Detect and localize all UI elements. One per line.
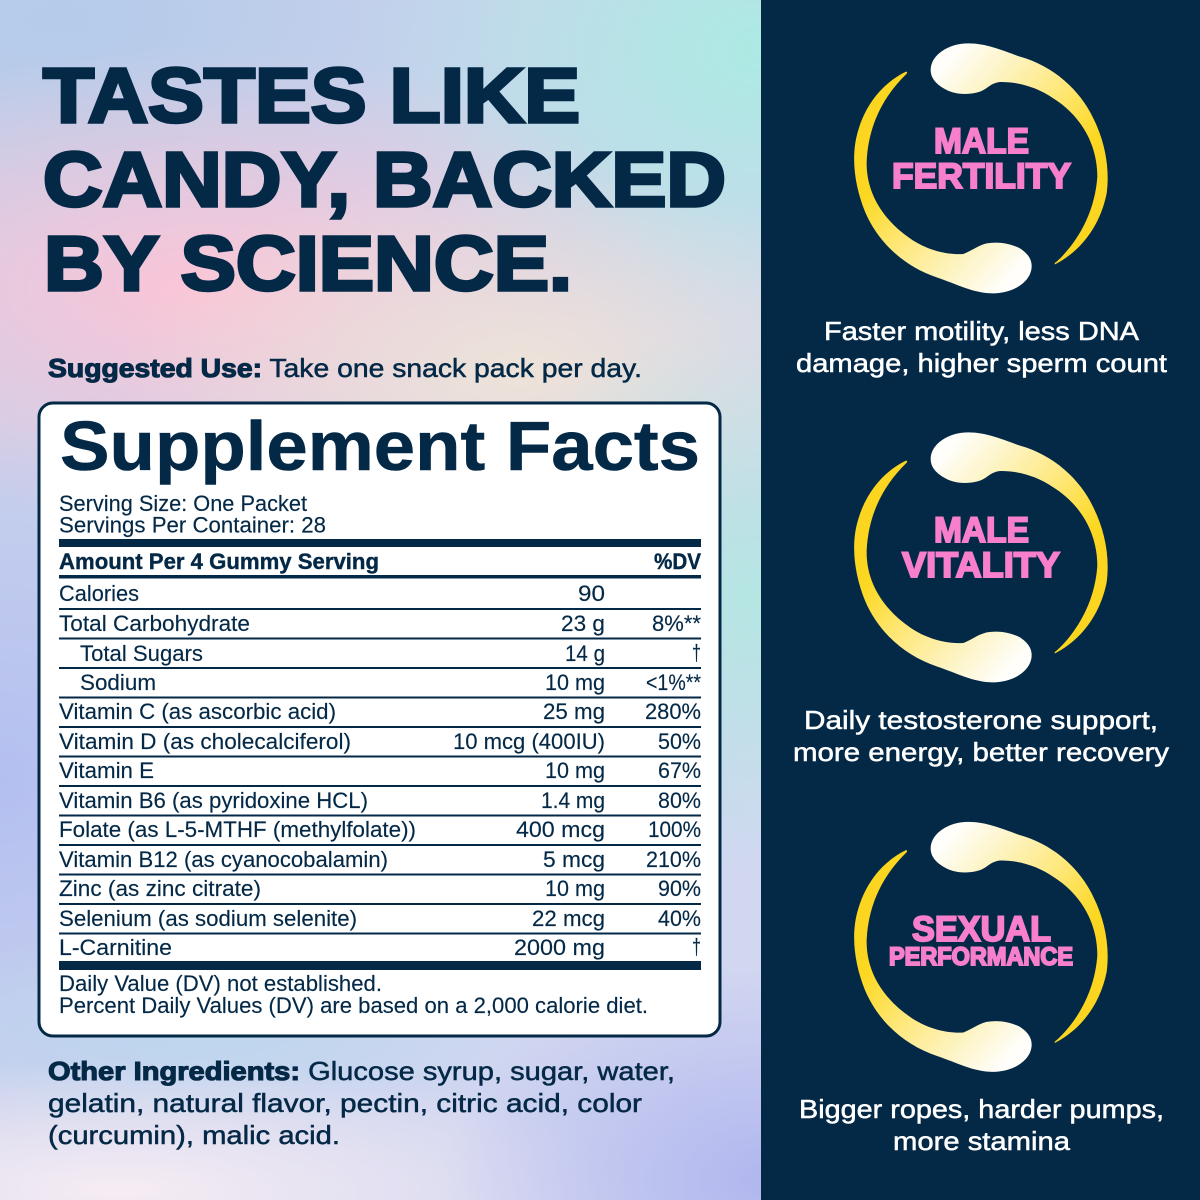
suggested use: Suggested Use: Take one snack pack per day. [48, 353, 642, 383]
nutrient rows: Total Sugars [80, 641, 203, 666]
nutrient rows: 5 mcg [543, 847, 605, 872]
sexual performance label [889, 910, 1073, 971]
header bars and rules [59, 539, 701, 970]
table header [59, 549, 701, 574]
icon: male fertility ring [854, 43, 1108, 293]
title: TASTES LIKE [43, 53, 580, 139]
other ingredients: (curcumin), malic acid. [48, 1120, 340, 1150]
dark right panel [761, 0, 1200, 1200]
nutrient rows: Selenium (as sodium selenite) [59, 906, 357, 931]
nutrient rows: 2000 mg [514, 935, 605, 960]
male fertility caption: damage, higher sperm count [796, 348, 1168, 378]
nutrient rows: Vitamin D (as cholecalciferol) [59, 729, 351, 754]
heading: Supplement Facts [60, 407, 700, 485]
footnotes: Percent Daily Values (DV) are based on a 2,000 calorie diet. [59, 993, 648, 1018]
nutrient rows: 50% [658, 729, 701, 754]
nutrient rows: 10 mg [545, 758, 605, 783]
nutrient rows: 14 g [565, 641, 605, 666]
sexual performance label: SEXUAL [912, 910, 1051, 949]
nutrient rows: Vitamin B12 (as cyanocobalamin) [59, 847, 388, 872]
nutrient rows: Folate (as L-5-MTHF (methylfolate)) [59, 817, 416, 842]
nutrient rows: <1%** [646, 670, 701, 695]
other ingredients [48, 1056, 675, 1150]
title: BY SCIENCE. [44, 221, 572, 307]
nutrient rows: 8%** [652, 611, 701, 636]
other ingredients: Other Ingredients: Glucose syrup, sugar, water, [48, 1056, 675, 1086]
sexual performance label: PERFORMANCE [889, 943, 1073, 971]
nutrient rows: 25 mg [543, 699, 605, 724]
nutrient rows: Sodium [80, 670, 156, 695]
nutrient rows: 90% [658, 876, 701, 901]
sexual performance caption [799, 1094, 1164, 1156]
nutrient rows: Vitamin B6 (as pyridoxine HCL) [59, 788, 368, 813]
nutrient rows: L-Carnitine [59, 935, 172, 960]
nutrient rows: 40% [658, 906, 701, 931]
male vitality label: VITALITY [902, 546, 1060, 585]
icon: male vitality ring [854, 432, 1108, 682]
serving info: Serving Size: One Packet [59, 491, 307, 516]
nutrient rows: 23 g [561, 611, 605, 636]
other ingredients: gelatin, natural flavor, pectin, citric acid, color [48, 1088, 642, 1118]
nutrient rows: † [692, 934, 701, 959]
nutrient rows: 10 mcg (400IU) [453, 729, 605, 754]
nutrient rows: † [692, 640, 701, 665]
nutrient rows: 22 mcg [532, 906, 605, 931]
nutrient rows: 67% [658, 758, 701, 783]
title: CANDY, BACKED [43, 137, 726, 223]
nutrient rows: 10 mg [545, 876, 605, 901]
gradient background panel [0, 0, 762, 1200]
nutrient rows: 10 mg [545, 670, 605, 695]
nutrient rows: 1.4 mg [541, 788, 605, 813]
male fertility label: FERTILITY [892, 157, 1071, 196]
male vitality caption: Daily testosterone support, [804, 705, 1158, 735]
male fertility caption: Faster motility, less DNA [824, 316, 1140, 346]
sexual performance caption: Bigger ropes, harder pumps, [799, 1094, 1164, 1124]
footnotes: Daily Value (DV) not established. [59, 971, 382, 996]
nutrient rows: 100% [648, 817, 701, 842]
male fertility caption [796, 316, 1168, 378]
male vitality label [902, 511, 1060, 585]
nutrient rows [59, 581, 701, 960]
nutrient rows: Vitamin C (as ascorbic acid) [59, 699, 336, 724]
nutrient rows: Total Carbohydrate [59, 611, 250, 636]
nutrient rows: 400 mcg [516, 817, 605, 842]
serving info: Servings Per Container: 28 [59, 512, 326, 538]
icon: sexual performance ring [854, 822, 1108, 1072]
panel: supplement facts [39, 403, 720, 1036]
footnotes [59, 971, 648, 1018]
male fertility label [892, 122, 1071, 196]
nutrient rows: Calories [59, 581, 139, 606]
table header: %DV [654, 549, 701, 574]
male vitality label: MALE [934, 511, 1029, 550]
serving info [59, 491, 326, 538]
nutrient rows: 210% [646, 847, 701, 872]
nutrient rows: 80% [658, 788, 701, 813]
male vitality caption [793, 705, 1169, 767]
nutrient rows: Vitamin E [59, 758, 154, 783]
nutrient rows: 90 [578, 581, 605, 606]
nutrient rows: Zinc (as zinc citrate) [59, 876, 261, 901]
nutrient rows: 280% [645, 699, 701, 724]
male fertility label: MALE [934, 122, 1029, 161]
table header: Amount Per 4 Gummy Serving [59, 549, 379, 574]
sexual performance caption: more stamina [893, 1126, 1071, 1156]
title [43, 53, 726, 307]
male vitality caption: more energy, better recovery [793, 737, 1169, 767]
